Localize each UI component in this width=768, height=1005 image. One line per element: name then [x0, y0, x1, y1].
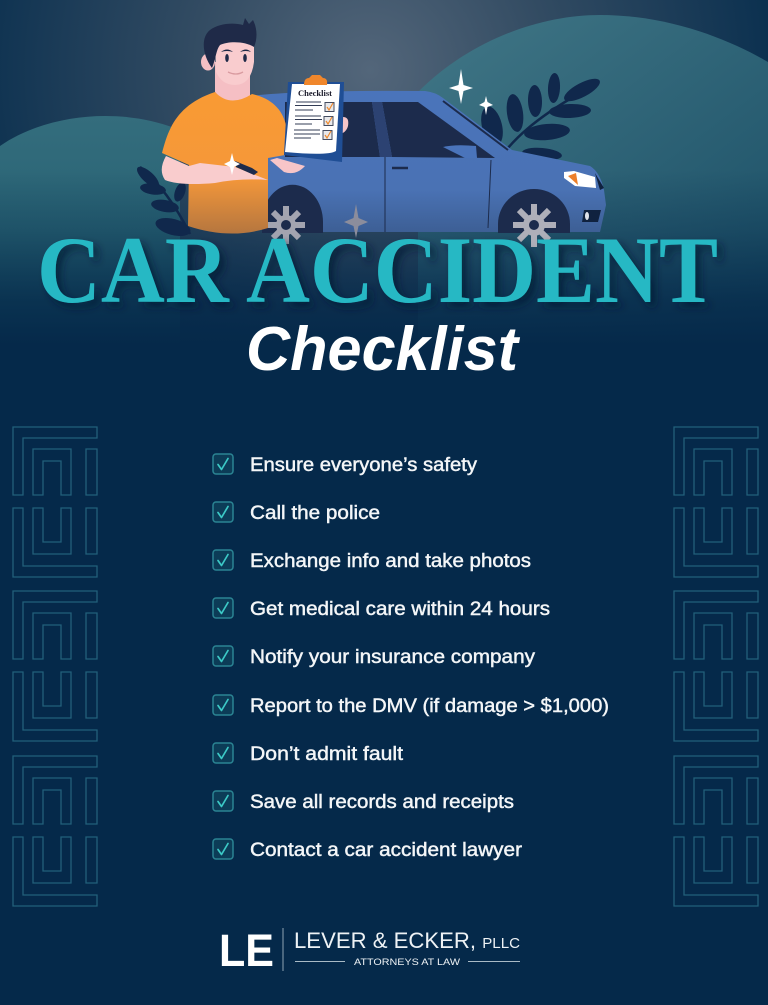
- header glow: [0, 0, 768, 345]
- front wheel: [498, 189, 570, 233]
- item 9: Contact a car accident lawyer: [250, 840, 523, 861]
- clipboard lines: [294, 102, 322, 138]
- shirt: [162, 92, 286, 234]
- car key: [235, 161, 258, 175]
- hair: [204, 18, 256, 68]
- face: [221, 50, 251, 74]
- sparkles: [224, 69, 493, 238]
- car body: [250, 91, 606, 232]
- car windows: [285, 102, 380, 157]
- item 5: Notify your insurance company: [250, 647, 536, 668]
- checklist: [213, 454, 609, 861]
- logo divider: [282, 928, 284, 971]
- clipboard ticks: [323, 102, 334, 140]
- car fog lamp: [582, 210, 601, 222]
- forearm: [162, 156, 268, 184]
- illustration: person: [162, 18, 348, 234]
- item 3: Exchange info and take photos: [250, 551, 531, 572]
- head: [215, 38, 254, 85]
- rear wheel: [262, 185, 323, 233]
- ear: [201, 54, 215, 70]
- front hub: [513, 204, 556, 247]
- right hill: [418, 15, 768, 345]
- illustration: right plant: [477, 73, 603, 162]
- neck: [215, 62, 250, 106]
- firm name: LEVER & ECKER, PLLC: [294, 928, 520, 953]
- car door seams: [385, 157, 491, 232]
- arm behind: [270, 158, 305, 173]
- item 2: Call the police: [250, 503, 380, 524]
- right maze pattern: [674, 427, 758, 906]
- header fade: [0, 170, 768, 345]
- logo: [219, 925, 520, 976]
- item 6: Report to the DMV (if damage > $1,000): [250, 696, 609, 717]
- item 7: [213, 743, 404, 765]
- illustration: car: [250, 91, 606, 247]
- clipboard heading: Checklist: [298, 88, 332, 98]
- item 4: Get medical care within 24 hours: [250, 599, 550, 620]
- left hill: [0, 116, 180, 345]
- car headlight: [564, 171, 596, 188]
- title: CAR ACCIDENT: [37, 217, 718, 323]
- clipboard hand: [336, 117, 348, 135]
- rear hub: [267, 206, 305, 244]
- item 1: Ensure everyone’s safety: [250, 455, 478, 476]
- item 7: Don’t admit fault: [250, 744, 404, 765]
- illustration: left plant: [134, 164, 192, 239]
- firm tagline: ATTORNEYS AT LAW: [354, 957, 461, 967]
- item 2: [213, 502, 380, 524]
- logo monogram: LE: [219, 925, 274, 976]
- subtitle: Checklist: [246, 315, 520, 384]
- clipboard: [284, 82, 344, 162]
- clipboard clip: [304, 75, 327, 85]
- item 8: Save all records and receipts: [250, 792, 514, 813]
- clipboard paper: [285, 84, 340, 154]
- left maze pattern: [13, 427, 97, 906]
